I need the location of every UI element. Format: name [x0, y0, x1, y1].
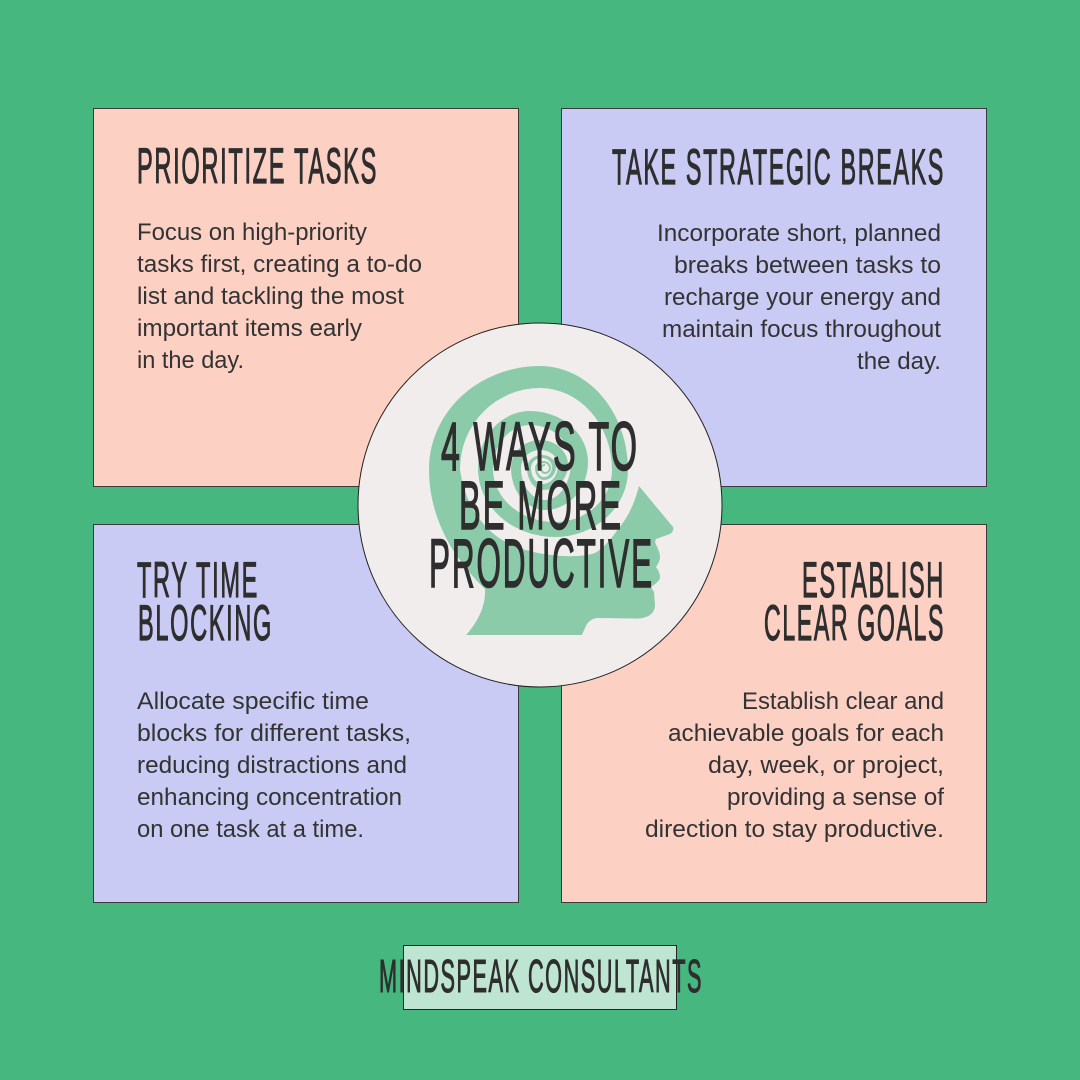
text block: establish clear goals: direction to stay productive. — [645, 816, 944, 843]
heading: try time blocking — [137, 552, 273, 651]
text block: establish clear goals: Establish clear and — [742, 688, 944, 715]
text block: try time blocking: reducing distractions and — [137, 752, 407, 779]
text block: prioritize tasks — [137, 219, 422, 374]
text block: prioritize tasks: Focus on high-priority — [137, 219, 367, 246]
text block: prioritize tasks: in the day. — [137, 347, 244, 374]
text block: take strategic breaks: recharge your energy and — [664, 284, 941, 311]
footer badge — [379, 946, 703, 1010]
text block: take strategic breaks: breaks between tasks to — [674, 252, 941, 279]
text block: establish clear goals — [645, 688, 944, 843]
text block: prioritize tasks: tasks first, creating a to-do — [137, 251, 422, 278]
text block: take strategic breaks: Incorporate short, planned — [657, 220, 941, 247]
text block: take strategic breaks — [657, 220, 941, 375]
text: PRODUCTIVE — [429, 525, 654, 602]
text block: try time blocking: enhancing concentration — [137, 784, 402, 811]
center circle — [358, 323, 722, 687]
text block: take strategic breaks: the day. — [857, 348, 941, 375]
center title: BE MORE — [459, 467, 623, 544]
heading: establish clear goals — [764, 552, 945, 651]
center title: 4 WAYS TO — [441, 408, 639, 485]
text block: try time blocking — [137, 688, 411, 843]
panel: establish clear goals — [562, 524, 986, 902]
text block: prioritize tasks: list and tackling the most — [137, 283, 404, 310]
text block: establish clear goals: day, week, or project, — [708, 752, 944, 779]
heading: try time blocking: TRY TIME — [137, 552, 259, 608]
text block: take strategic breaks: maintain focus throughout — [662, 316, 941, 343]
panel: take strategic breaks — [562, 108, 986, 486]
text block: establish clear goals: providing a sense of — [727, 784, 944, 811]
text block: prioritize tasks: important items early — [137, 315, 362, 342]
text block: try time blocking: blocks for different tasks, — [137, 720, 411, 747]
text block: establish clear goals: achievable goals for each — [668, 720, 944, 747]
text: MINDSPEAK CONSULTANTS — [379, 950, 703, 1002]
panel: prioritize tasks — [94, 108, 518, 486]
panel: try time blocking — [94, 524, 518, 902]
panel: try time blocking: BLOCKING — [138, 595, 273, 651]
text block: try time blocking: Allocate specific time — [137, 688, 369, 715]
text block: try time blocking: on one task at a time. — [137, 816, 364, 843]
center title — [429, 408, 654, 602]
panel: prioritize tasks: PRIORITIZE TASKS — [137, 138, 378, 194]
icon: head with spiral — [429, 366, 673, 635]
